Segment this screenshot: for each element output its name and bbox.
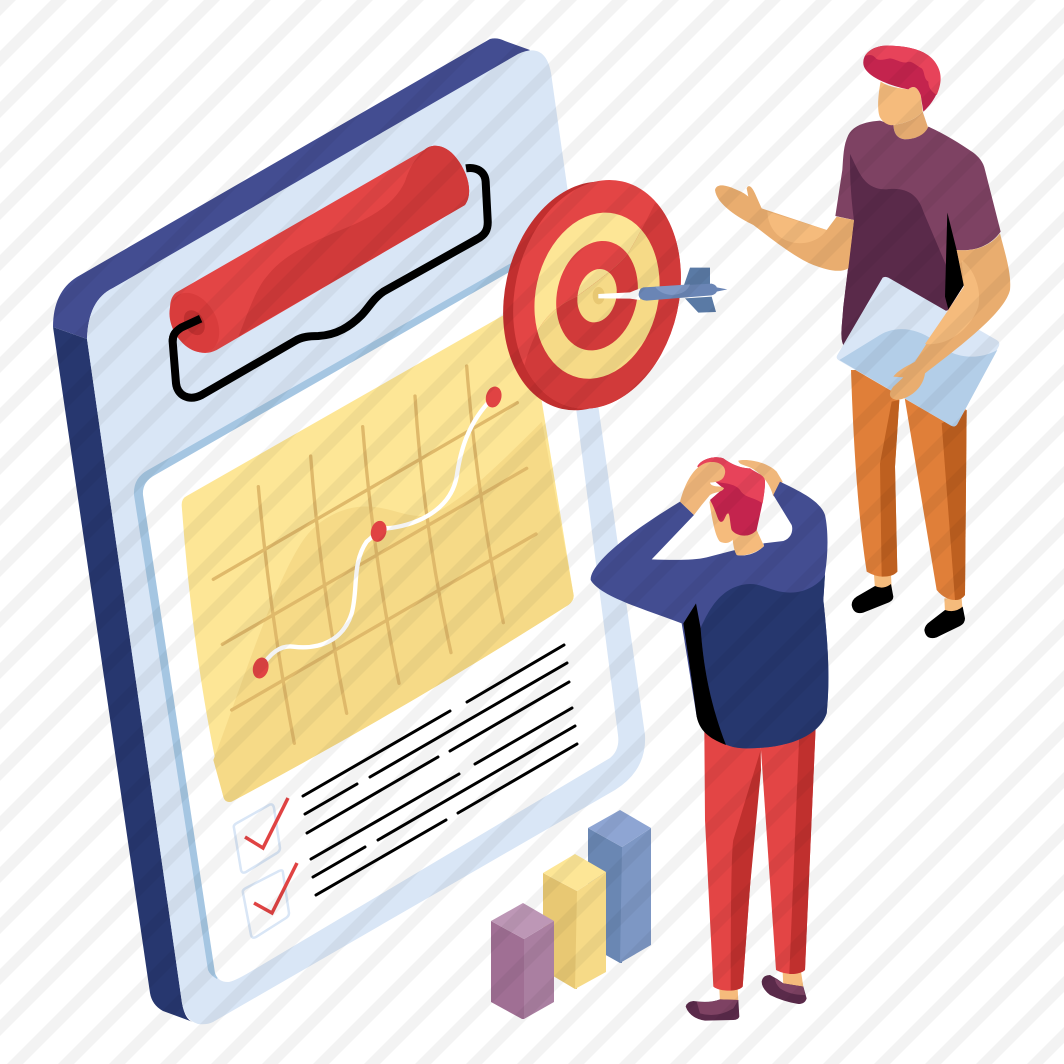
clip wire [173, 168, 488, 398]
tablet [837, 277, 999, 426]
legs [686, 727, 816, 1021]
chart paper shading [213, 422, 574, 802]
extended arm [715, 185, 854, 271]
wire over roller end [173, 319, 201, 342]
left trouser leg [704, 730, 761, 991]
holding arm highlight [925, 260, 979, 344]
right trouser leg [903, 380, 967, 600]
left shoe [852, 584, 893, 613]
neck [732, 530, 764, 555]
left shoe highlight [697, 999, 738, 1015]
left trouser shadow [880, 400, 899, 577]
dart needle [598, 288, 640, 300]
hair [863, 46, 940, 112]
holding arm [890, 233, 1010, 400]
neck [893, 112, 928, 139]
right ankle [944, 598, 963, 612]
roller body [170, 146, 469, 353]
clipboard [53, 38, 645, 1024]
left ankle [874, 575, 892, 588]
white page [143, 266, 618, 982]
left ankle [719, 988, 738, 1002]
chart grid [213, 366, 536, 743]
upper body [715, 46, 1010, 426]
roller shading [238, 146, 469, 337]
confused man [591, 457, 828, 1021]
far hand [738, 460, 783, 497]
yellow chart panel [182, 313, 574, 802]
hair highlight [865, 46, 941, 95]
near hand [680, 462, 725, 515]
checkbox 1 [234, 798, 288, 873]
extended arm highlight [767, 212, 827, 243]
chart line [261, 397, 493, 668]
target with dart [503, 180, 728, 410]
jumper inner black [683, 603, 726, 745]
clip wire and roller [159, 146, 488, 398]
clipboard dark top edge [53, 38, 530, 339]
target face [492, 164, 702, 425]
right shoe [762, 975, 807, 1004]
legs [851, 370, 967, 638]
dart body highlight [655, 284, 690, 295]
right trouser shadow [789, 727, 816, 974]
roller hole [180, 306, 209, 339]
jumper shadow [701, 575, 828, 748]
chart points [250, 385, 504, 680]
bullseye [593, 287, 605, 304]
checkbox 2 [243, 863, 297, 938]
purple bar [491, 903, 554, 1019]
left trouser leg [851, 370, 899, 577]
jumper [591, 482, 828, 748]
chart paper [182, 313, 574, 802]
shirt [835, 121, 1001, 345]
face [878, 82, 923, 125]
blue bar [588, 810, 651, 963]
text lines [303, 645, 577, 895]
right trouser shadow [942, 410, 967, 600]
target shading [524, 204, 681, 408]
dart tip [717, 287, 727, 292]
left shoe [686, 999, 739, 1021]
right shoe highlight [775, 978, 805, 995]
dart [598, 268, 727, 313]
clipboard light board [87, 50, 645, 1024]
dart body [639, 284, 717, 301]
hair highlight [697, 457, 765, 503]
face [709, 493, 747, 543]
right shoe [924, 607, 965, 638]
roller end [159, 284, 229, 361]
clipboard dark side edge [53, 327, 193, 1022]
dart fins [684, 268, 716, 313]
shirt inner black [945, 213, 964, 309]
right trouser leg [761, 727, 816, 974]
tablet shading [839, 329, 997, 426]
upper body [591, 457, 828, 748]
right ankle [783, 972, 803, 987]
target side [482, 165, 692, 427]
man with tablet [715, 46, 1010, 638]
hair [697, 457, 765, 536]
isometric bar chart [491, 810, 651, 1019]
left trouser shadow [731, 750, 761, 991]
page shadow edge [134, 258, 530, 979]
shirt shadow [841, 154, 948, 345]
yellow bar [543, 854, 606, 989]
